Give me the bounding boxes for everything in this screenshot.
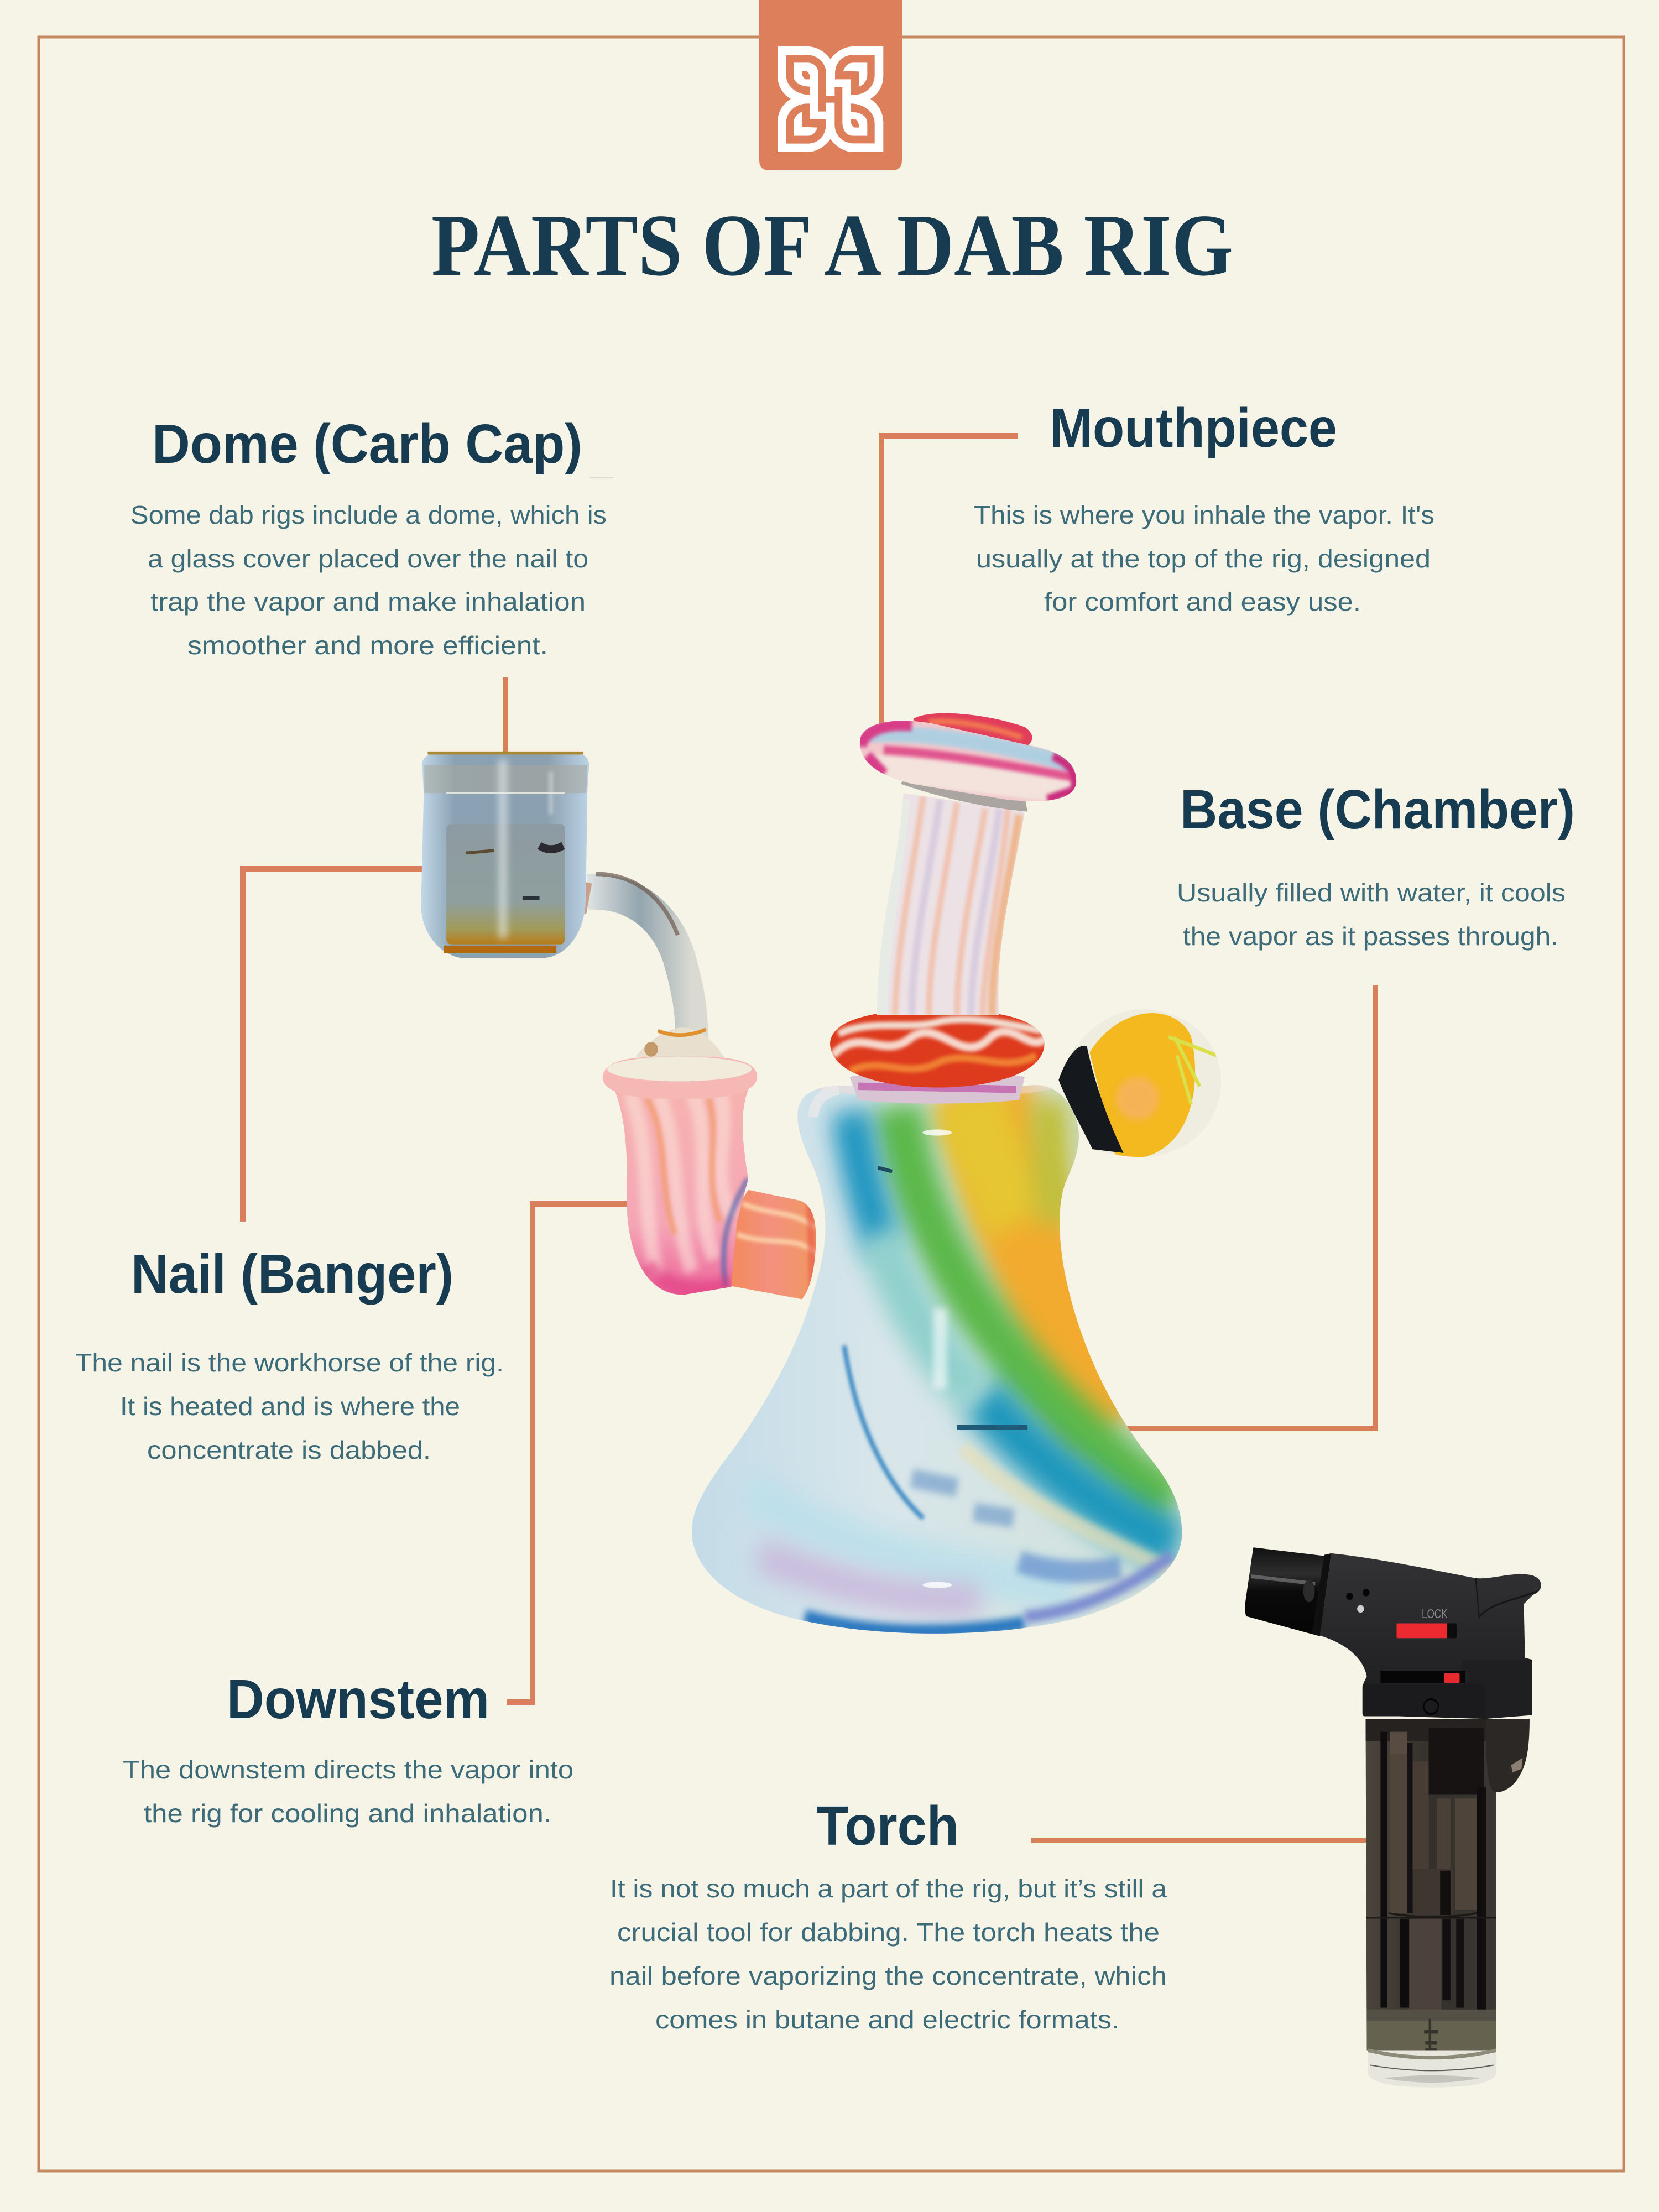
connector: dome to nail lines (240, 677, 508, 1222)
body: mouthpiece: usually at the top of the rig, designed (976, 544, 1431, 573)
torch head: LOCK (1422, 1608, 1448, 1621)
body: nail: It is heated and is where the (120, 1392, 460, 1421)
body: dome (131, 500, 607, 660)
connector: downstem (507, 1204, 630, 1702)
trigger guard (1486, 1719, 1530, 1792)
body: base: Usually filled with water, it cools (1177, 878, 1566, 907)
heading: nail: Nail (Banger) (131, 1243, 453, 1305)
connector: torch (1031, 1838, 1369, 1843)
bowl joint (603, 1056, 757, 1302)
body: mouthpiece: This is where you inhale the vapor. It's (974, 500, 1434, 529)
body: downstem (123, 1755, 573, 1828)
body: dome: Some dab rigs include a dome, which is (131, 500, 607, 529)
illustration: dab rig (421, 713, 1228, 1648)
heading: downstem: Downstem (227, 1668, 489, 1730)
connector: mouthpiece (881, 436, 1018, 730)
panel: mouthpiece (974, 397, 1434, 616)
heading: torch: Torch (816, 1795, 959, 1857)
torch tank (1365, 1719, 1496, 2087)
torch nozzle (1245, 1547, 1331, 1636)
body: torch: comes in butane and electric formats. (655, 2005, 1119, 2034)
heading: dome: Dome (Carb Cap) (152, 413, 582, 475)
body: nail: The nail is the workhorse of the rig. (75, 1348, 504, 1377)
body: nail: concentrate is dabbed. (147, 1436, 431, 1464)
torch head (1320, 1553, 1541, 1719)
chamber body (681, 1068, 1194, 1648)
body: torch (609, 1874, 1167, 2034)
body: dome: a glass cover placed over the nail to (148, 544, 588, 573)
panel: nail (banger) (75, 1243, 504, 1464)
body: torch: nail before vaporizing the concentrate, which (609, 1961, 1167, 1990)
stem mouthpiece tube (873, 781, 1030, 1019)
downstem joint tube (731, 1190, 816, 1300)
marble (1058, 1013, 1217, 1157)
mouthpiece top disc (855, 713, 1081, 805)
body: downstem: the rig for cooling and inhalation. (144, 1799, 551, 1828)
body: dome: trap the vapor and make inhalation (150, 587, 586, 616)
panel: dome (carb cap) (131, 413, 607, 660)
body: base (1177, 878, 1566, 951)
body: mouthpiece: for comfort and easy use. (1044, 587, 1361, 616)
panel: downstem (123, 1668, 573, 1828)
body: torch: It is not so much a part of the rig, but it’s still a (610, 1874, 1167, 1903)
body: torch: crucial tool for dabbing. The torch heats the (617, 1918, 1160, 1947)
icon: knot logo (778, 46, 883, 152)
title: PARTS OF A DAB RIG (431, 196, 1233, 294)
body: base: the vapor as it passes through. (1183, 922, 1558, 951)
body: dome: smoother and more efficient. (187, 631, 548, 660)
panel: torch (609, 1795, 1167, 2034)
connector: base (1123, 985, 1375, 1428)
heading: mouthpiece: Mouthpiece (1050, 397, 1337, 459)
logo badge (759, 0, 902, 170)
heading: base: Base (Chamber) (1180, 779, 1575, 841)
panel: base (chamber) (1177, 779, 1575, 951)
body: nail (75, 1348, 504, 1464)
body: downstem: The downstem directs the vapor into (123, 1755, 573, 1784)
body: mouthpiece (974, 500, 1434, 616)
illustration: butane torch (1245, 1547, 1541, 2087)
nail bucket (421, 752, 589, 958)
red ring collar (830, 1014, 1045, 1104)
nail arm (582, 874, 726, 1060)
